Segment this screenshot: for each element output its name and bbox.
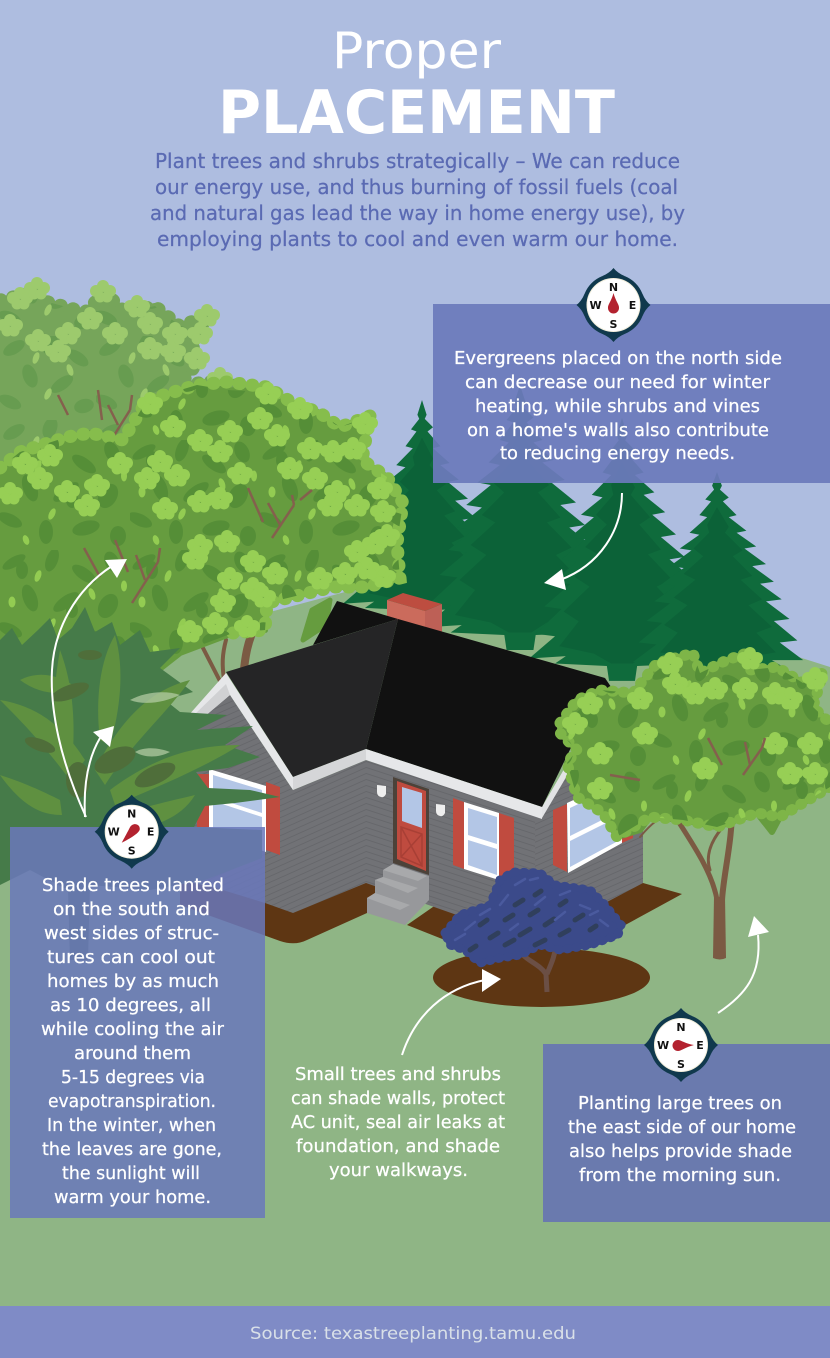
compass: east: W <box>657 1039 669 1052</box>
front wall <box>366 760 542 945</box>
compass: east: N <box>676 1021 686 1034</box>
mulch circle <box>433 948 650 1007</box>
arrow: to upper shade tree <box>52 559 127 817</box>
steps <box>367 864 429 925</box>
title: Proper <box>332 22 501 80</box>
compass: southwest: E <box>147 826 154 839</box>
north callout text <box>454 349 782 464</box>
small trees text block: your walkways. <box>329 1161 468 1181</box>
south and west callout text: 5-15 degrees via <box>61 1068 205 1088</box>
small trees text block: AC unit, seal air leaks at <box>291 1113 505 1133</box>
arrow: to east tree <box>718 916 769 1013</box>
title: PLACEMENT <box>218 78 615 148</box>
compass: southwest <box>95 795 169 869</box>
right window <box>553 778 633 873</box>
chimney <box>387 593 442 635</box>
intro text: employing plants to cool and even warm our home. <box>157 227 678 251</box>
intro text <box>150 149 685 251</box>
trunk of right tree <box>640 793 732 960</box>
south and west callout text: warm your home. <box>54 1188 211 1208</box>
south and west callout text: as 10 degrees, all <box>50 996 211 1016</box>
small trees text block: can shade walls, protect <box>291 1089 505 1109</box>
arrow: to evergreens <box>544 493 622 590</box>
house <box>188 593 643 945</box>
south and west callout text: while cooling the air <box>41 1020 225 1040</box>
south and west callout text: tures can cool out <box>47 948 215 968</box>
compass: north: E <box>629 299 636 312</box>
arrow: to shrub <box>402 969 501 1055</box>
compass: southwest: N <box>127 808 136 821</box>
source bar: Source: texastreeplanting.tamu.edu <box>250 1324 576 1344</box>
compass: east <box>644 1008 718 1082</box>
lobe near roof <box>303 600 330 640</box>
right gable wall <box>535 700 643 940</box>
evergreen trees <box>343 385 803 681</box>
south and west callout text: around them <box>74 1044 191 1064</box>
indigo shrub <box>445 872 621 992</box>
north callout text: can decrease our need for winter <box>465 373 771 393</box>
wall lights <box>377 785 445 816</box>
south and west callout text: Shade trees planted <box>42 876 224 896</box>
south and west callout text: west sides of struc- <box>44 924 219 944</box>
eave trim <box>366 749 542 819</box>
south and west callout text <box>41 876 225 1208</box>
small trees text block <box>291 1065 505 1181</box>
arrow: to lower tree <box>85 726 114 817</box>
north callout text: heating, while shrubs and vines <box>475 397 760 417</box>
south and west callout text: In the winter, when <box>47 1116 216 1136</box>
east callout text: Planting large trees on <box>578 1094 782 1114</box>
south and west callout text: evapotranspiration. <box>48 1092 216 1112</box>
intro text: and natural gas lead the way in home energy use), by <box>150 201 685 225</box>
south and west callout text: the sunlight will <box>62 1164 200 1184</box>
south and west callout text: on the south and <box>53 900 210 920</box>
back deciduous tree <box>0 277 250 530</box>
front-left conifer tree <box>0 607 280 960</box>
north callout panel <box>433 304 830 483</box>
middle wall <box>293 760 366 913</box>
south and west callout text: the leaves are gone, <box>42 1140 222 1160</box>
north callout text: to reducing energy needs. <box>500 444 735 464</box>
south and west callout text: homes by as much <box>47 972 219 992</box>
south and west callout panel <box>10 827 265 1218</box>
door <box>393 777 429 875</box>
gable roof <box>226 619 398 777</box>
right tree <box>560 647 830 960</box>
mulch bed behind house <box>180 875 682 950</box>
right gable black edge <box>590 678 636 730</box>
intro text: Plant trees and shrubs strategically – We can reduce <box>155 149 680 173</box>
small trees text block: Small trees and shrubs <box>295 1065 501 1085</box>
compass: southwest: S <box>128 845 136 858</box>
compass: east: S <box>677 1058 685 1071</box>
left gable trim <box>188 673 293 790</box>
compass: east: E <box>696 1039 704 1052</box>
front window <box>453 798 514 880</box>
east callout text: from the morning sun. <box>579 1166 781 1186</box>
compass: north: N <box>609 281 618 294</box>
intro text: our energy use, and thus burning of fossil fuels (coal <box>155 175 678 199</box>
small trees text block: foundation, and shade <box>296 1137 500 1157</box>
main roof <box>366 619 605 807</box>
east callout text: the east side of our home <box>568 1118 796 1138</box>
north callout text: on a home's walls also contribute <box>467 421 769 441</box>
compass: north: W <box>589 299 602 312</box>
compass: north <box>576 268 650 342</box>
source bar <box>0 1306 830 1358</box>
right gable trim <box>542 690 614 818</box>
compass: southwest: W <box>108 826 120 839</box>
title <box>218 22 615 148</box>
compass: north: S <box>610 318 618 331</box>
north callout text: Evergreens placed on the north side <box>454 349 782 369</box>
east callout panel <box>543 1044 830 1222</box>
left gable wall <box>188 695 293 913</box>
back roof <box>313 601 398 645</box>
east callout text <box>568 1094 796 1186</box>
ground <box>0 556 830 1358</box>
left window <box>197 769 280 855</box>
main shade tree <box>0 382 403 720</box>
east callout text: also helps provide shade <box>569 1142 792 1162</box>
trunks of main tree <box>203 625 256 685</box>
